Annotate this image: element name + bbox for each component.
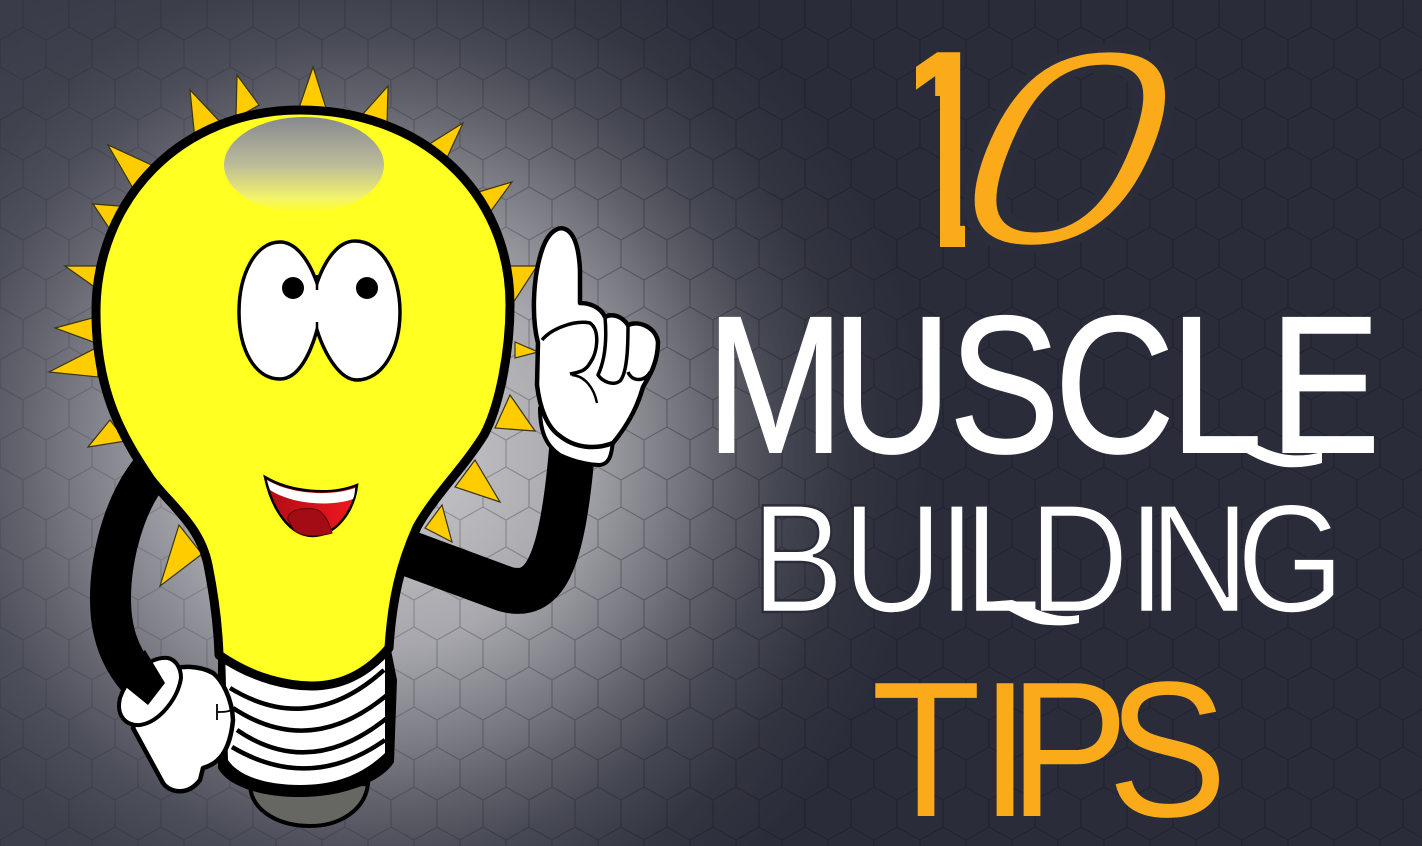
icon: eyes xyxy=(239,241,400,380)
icon: gripping hand xyxy=(119,650,234,791)
illustration: light bulb character xyxy=(49,67,658,826)
bulb highlight xyxy=(224,117,384,213)
bulb screw base xyxy=(218,640,397,797)
right arm xyxy=(405,450,572,591)
title: 10 xyxy=(916,45,1174,252)
bulb screw cap xyxy=(250,784,368,826)
left arm xyxy=(111,472,152,694)
icon: sun rays xyxy=(49,67,538,586)
icon: pointing hand xyxy=(534,228,658,465)
icon: mouth xyxy=(265,477,357,536)
title: MUSCLE: MUSCLE xyxy=(706,276,1380,494)
title: BUILDING: BUILDING xyxy=(751,473,1345,646)
bulb glass xyxy=(96,110,510,686)
title: 10: 1 xyxy=(864,0,1021,307)
